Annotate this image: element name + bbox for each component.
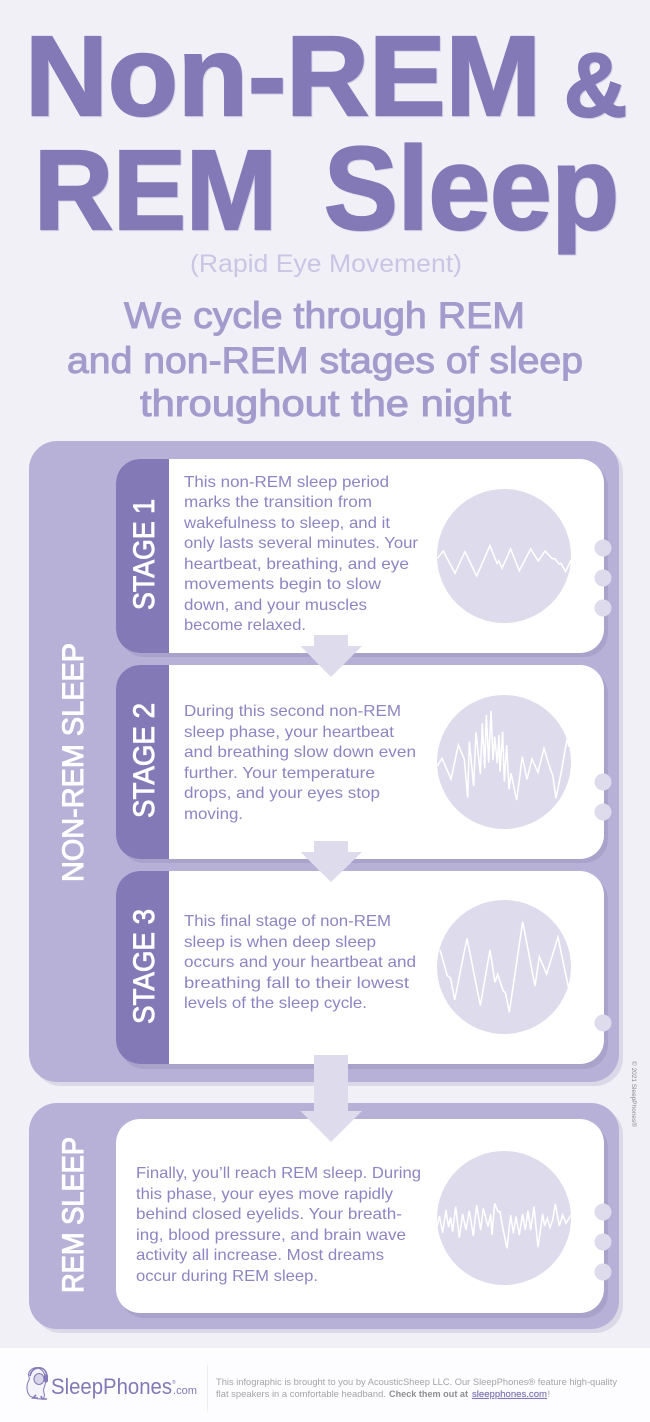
logo wordmark: ® (172, 1379, 176, 1386)
footer text: ! (548, 1389, 550, 1400)
icon: sheep with headphones logo (27, 1368, 48, 1399)
panel: REM sleep (29, 1103, 623, 1333)
label: stage 1: STAGE 1 (128, 499, 161, 610)
text: stage 3 description (184, 913, 416, 1012)
card: REM (116, 1119, 612, 1318)
footer text: flat speakers in a comfortable headband. (216, 1389, 386, 1400)
text: stage 2 description: and breathing slow down even (184, 744, 416, 761)
text: REM description: occur during REM sleep. (136, 1268, 318, 1285)
title: Non-REM (25, 13, 541, 139)
text: stage 1 description: down, and your muscles (184, 597, 367, 614)
footer text: This infographic is brought to you by AcousticSheep LLC. Our SleepPhones® feature high-quality (216, 1377, 617, 1388)
footer (0, 1348, 650, 1422)
arrow: non-REM to REM (300, 1055, 362, 1142)
arrow: stage 1 to stage 2 (300, 635, 362, 677)
arrow: stage 2 to stage 3 (300, 841, 362, 882)
indicator dots: stage 1 (594, 540, 612, 616)
icon: stage 1 brain wave (437, 489, 571, 623)
copyright: © 2021 SleepPhones® (630, 1061, 638, 1127)
text: stage 2 description: further. Your temperature (184, 765, 375, 782)
title: REM (34, 127, 277, 253)
text: REM description (136, 1165, 421, 1285)
footer text: sleepphones.com (472, 1389, 547, 1400)
label: stage 2: STAGE 2 (128, 703, 161, 818)
panel: non-REM sleep (29, 441, 623, 1086)
label: non-REM sleep: NON-REM SLEEP (57, 643, 90, 882)
text: stage 3 description: occurs and your heartbeat and (184, 954, 416, 971)
heading: we cycle through REM: and non-REM stages of sleep (67, 340, 583, 381)
card: stage 1 (116, 459, 612, 657)
text: stage 1 description: movements begin to slow (184, 576, 381, 593)
text: stage 1 description: wakefulness to sleep, and it (183, 515, 391, 532)
text: stage 3 description: breathing fall to their lowest (184, 975, 410, 992)
footer text (216, 1377, 617, 1400)
text: stage 2 description: drops, and your eyes stop (184, 785, 380, 802)
text: stage 1 description: heartbeat, breathing, and eye (184, 556, 409, 573)
text: REM description: Finally, you’ll reach REM sleep. During (136, 1165, 421, 1182)
text: stage 1 description: become relaxed. (184, 617, 306, 634)
heading: we cycle through REM (67, 295, 583, 424)
text: stage 2 description (184, 703, 416, 823)
text: stage 1 description: only lasts several minutes. Your (184, 535, 419, 552)
footer text: Check them out at (389, 1389, 469, 1400)
text: stage 2 description: sleep phase, your heartbeat (184, 724, 395, 741)
title: & (564, 36, 627, 136)
text: stage 1 description: This non-REM sleep period (184, 474, 389, 491)
title (25, 13, 627, 255)
text: REM description: ing, blood pressure, and brain wave (136, 1227, 406, 1244)
indicator dots: stage 2 (594, 774, 612, 820)
card: stage 3 (116, 871, 612, 1069)
title: Sleep (324, 123, 619, 255)
subtitle: rapid eye movement: (Rapid Eye Movement) (190, 250, 462, 278)
text: REM description: behind closed eyelids. Your breath- (136, 1206, 402, 1223)
indicator dots: REM (594, 1204, 612, 1280)
text: REM description: this phase, your eyes move rapidly (136, 1186, 393, 1203)
card: stage 2 (116, 665, 612, 863)
text: stage 3 description: levels of the sleep cycle. (184, 995, 367, 1012)
text: stage 2 description: During this second non-REM (184, 703, 401, 720)
label: REM sleep: REM SLEEP (57, 1137, 90, 1293)
text: stage 1 description (183, 474, 419, 634)
heading: we cycle through REM: throughout the night (140, 383, 512, 424)
icon: REM brain wave (437, 1151, 571, 1285)
logo wordmark: SleepPhones (51, 1374, 172, 1399)
text: REM description: activity all increase. Most dreams (136, 1247, 384, 1264)
icon: stage 2 brain wave (437, 695, 571, 829)
text: stage 1 description: marks the transition from (184, 494, 372, 511)
indicator dot: stage 3 (594, 1014, 612, 1032)
text: stage 2 description: moving. (184, 806, 243, 823)
label: stage 3: STAGE 3 (128, 909, 161, 1024)
text: stage 3 description: sleep is when deep sleep (184, 934, 376, 951)
text: stage 3 description: This final stage of non-REM (184, 913, 391, 930)
heading: we cycle through REM: We cycle through REM (124, 295, 525, 336)
icon: stage 3 brain wave (437, 900, 571, 1034)
logo wordmark: .com (173, 1385, 197, 1397)
